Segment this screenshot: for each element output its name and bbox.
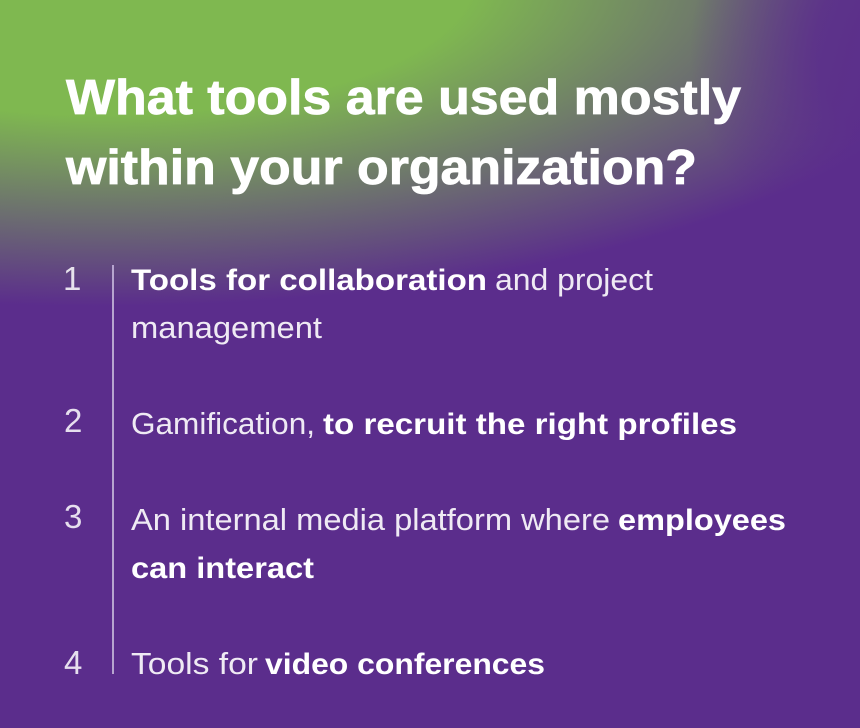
list item 2: 2 [64,402,82,439]
list item 1: management [131,310,322,345]
vertical divider [112,265,114,674]
list item 2: to recruit the right profiles [323,408,737,441]
list item 3: can interact [131,552,314,585]
list item 2: Gamification, [131,406,315,441]
list item 3: employees [618,504,786,537]
list item 3: An internal media platform where [131,502,610,537]
list item 4: video conferences [265,648,545,681]
list item 3: 3 [64,498,82,535]
list item 4: 4 [64,644,82,681]
list item 1: Tools for collaboration [131,264,487,297]
list item 1: and project [495,262,653,297]
title [65,71,741,195]
list item 4: Tools for [131,646,258,681]
list item 3 [64,498,786,585]
list item 4 [64,644,545,681]
title: within your organization? [65,141,697,195]
title: What tools are used mostly [66,71,741,125]
list item 1 [63,260,653,345]
list item 1: 1 [63,260,81,297]
list item 2 [64,402,737,441]
